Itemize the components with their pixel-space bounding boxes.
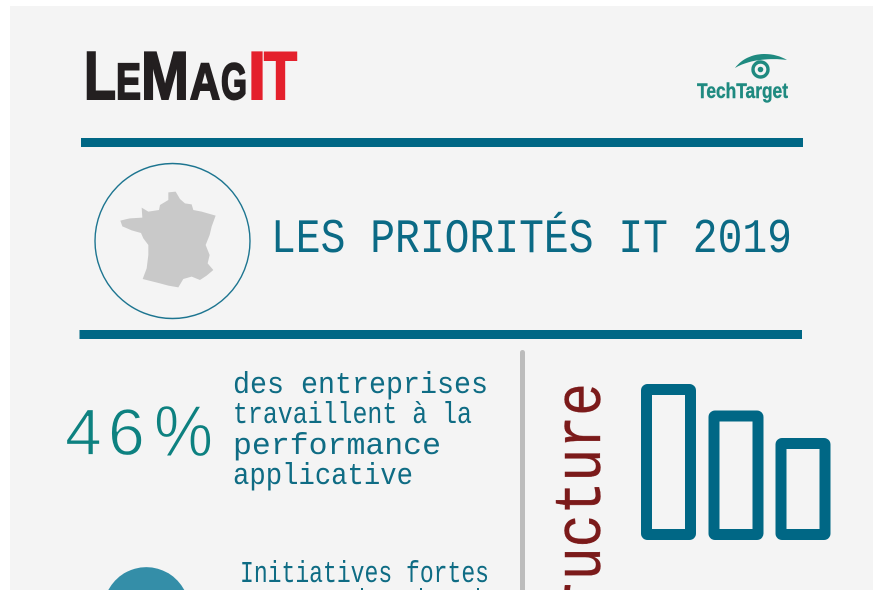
logo: LeMagIT: A	[190, 53, 220, 110]
stat: 46%: %	[154, 392, 213, 472]
bar 3	[781, 444, 825, 534]
top rule	[81, 138, 803, 147]
title: LES PRIORITÉS IT 2019	[271, 212, 792, 267]
icon: teal circle	[108, 567, 184, 590]
logo: TechTarget	[697, 54, 788, 103]
text block: performance applicative: applicative	[233, 459, 413, 494]
icon: France map in circle	[95, 164, 250, 318]
bar 2	[714, 416, 758, 534]
text block: performance applicative	[233, 368, 488, 494]
bar 1	[646, 390, 690, 534]
logo: LeMagIT: I	[248, 38, 266, 114]
logo: LeMagIT: L	[84, 38, 116, 114]
text block: performance applicative: performance	[233, 429, 441, 464]
logo: LeMagIT: M	[141, 38, 189, 114]
logo: LeMagIT: G	[221, 53, 247, 110]
logo: LeMagIT: T	[264, 38, 297, 114]
icon: TechTarget eye	[735, 54, 787, 77]
text: TechTarget wordmark: TechTarget	[697, 80, 788, 103]
icon: descending bars	[646, 390, 825, 534]
text block: clipped ascender tips of the cropped next line	[361, 588, 479, 590]
stat: 46%: 6	[108, 395, 145, 469]
stat: 46%: 4	[65, 395, 102, 469]
logo: LeMagIT	[84, 38, 297, 114]
vertical divider	[520, 350, 525, 590]
text block: performance applicative: travaillent à la	[233, 398, 472, 433]
stat: 46%	[65, 392, 213, 472]
bottom rule	[80, 330, 802, 339]
text block: performance applicative: des entreprises	[233, 368, 488, 403]
logo: LeMagIT: E	[116, 53, 141, 110]
